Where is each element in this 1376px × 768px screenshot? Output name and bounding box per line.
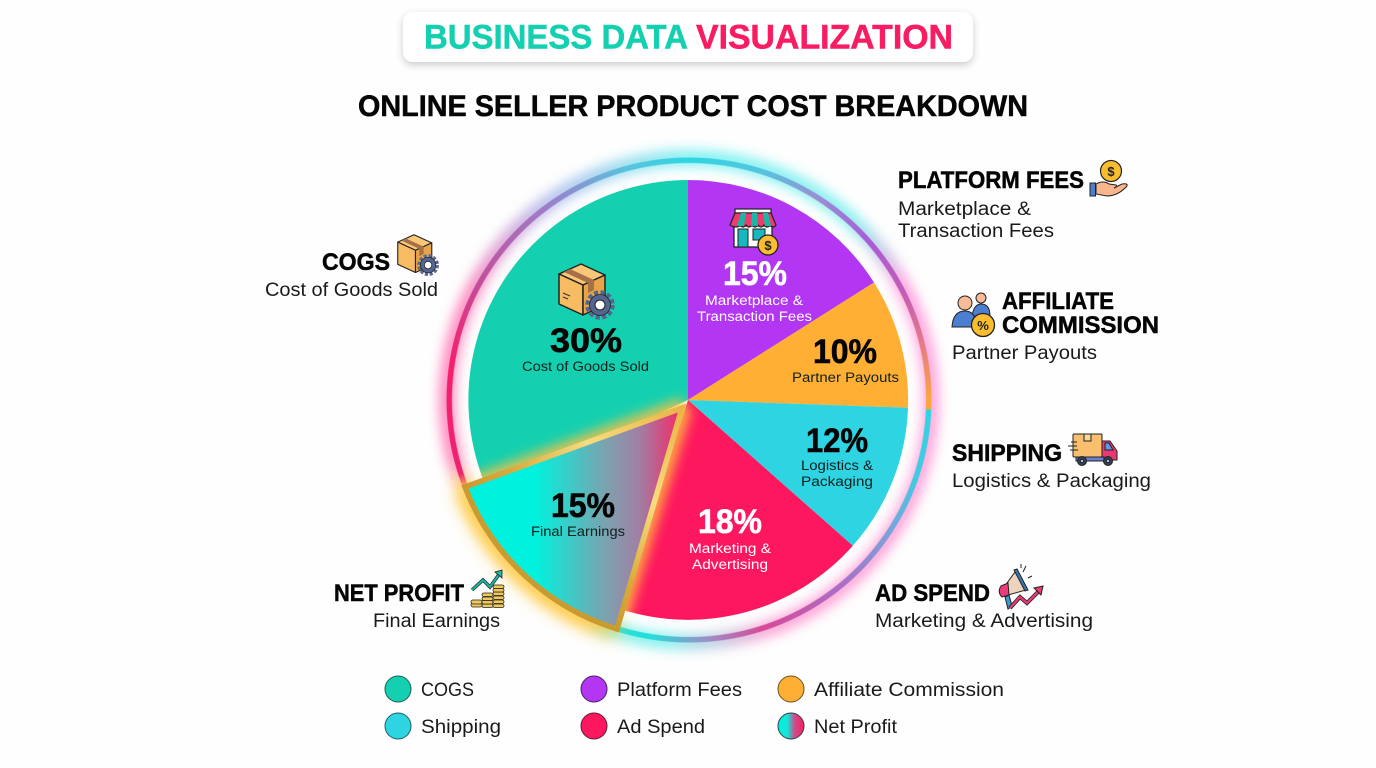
- title chip: [403, 12, 973, 62]
- icon: hand with coin: $: [1107, 164, 1115, 179]
- icon: hand with coin: [1090, 160, 1127, 196]
- callout: Affiliate Commission: COMMISSION: [1002, 312, 1159, 339]
- pie label: Net Profit: [531, 487, 625, 539]
- legend item: Affiliate Commission: Affiliate Commission: [814, 680, 1004, 701]
- callout: Ad Spend: [875, 580, 1093, 632]
- legend item: COGS: [385, 676, 474, 702]
- icon: storefront: $: [764, 238, 772, 253]
- callout: Affiliate Commission: AFFILIATE: [1002, 288, 1114, 315]
- callout: Net Profit: [334, 580, 500, 632]
- title chip: BUSINESS DATA: [424, 18, 688, 56]
- slice: COGS 30%: [468, 180, 688, 493]
- callout: Net Profit: NET PROFIT: [334, 580, 464, 607]
- callout: Platform Fees: PLATFORM FEES: [898, 167, 1084, 194]
- icon: megaphone with arrow: [999, 564, 1043, 609]
- icon: people with percent coin: %: [977, 318, 989, 333]
- title chip: VISUALIZATION: [696, 18, 953, 56]
- pie label: Ad Spend: 18%: [698, 503, 762, 541]
- callout: Shipping: [952, 440, 1151, 492]
- pie label: Ad Spend: Marketing &: [689, 541, 771, 556]
- callout: Affiliate Commission: Partner Payouts: [952, 343, 1097, 364]
- pie label: Ad Spend: Advertising: [692, 557, 768, 572]
- callout: Ad Spend: AD SPEND: [875, 580, 990, 607]
- pie label: Platform Fees: Transaction Fees: [697, 309, 812, 324]
- callout: COGS: Cost of Goods Sold: [265, 280, 438, 301]
- outer gradient ring: [446, 157, 932, 643]
- icon: people with percent coin: [952, 293, 994, 336]
- legend item: Shipping: Shipping: [421, 717, 501, 738]
- pie label: Shipping: Packaging: [801, 474, 873, 489]
- callout: Shipping: SHIPPING: [952, 440, 1062, 467]
- pie chart: [465, 180, 908, 629]
- legend item: Ad Spend: Ad Spend: [617, 717, 705, 738]
- infographic canvas: [266, 12, 1158, 740]
- legend item: Platform Fees: Platform Fees: [617, 680, 742, 701]
- callout: Platform Fees: [898, 167, 1084, 242]
- callout: Shipping: Logistics & Packaging: [952, 471, 1151, 492]
- callout: Ad Spend: Marketing & Advertising: [875, 611, 1093, 632]
- icon: coin stacks with growth arrow: [471, 570, 504, 608]
- pie label: Shipping: 12%: [806, 422, 868, 460]
- pie label: Net Profit: 15%: [551, 487, 615, 525]
- glow around pie ring: [430, 142, 947, 658]
- pie label: Ad Spend: [689, 503, 771, 572]
- slice: Affiliate Commission 10%: [688, 282, 908, 408]
- callout: COGS: [265, 249, 438, 301]
- pie label: Shipping: Logistics &: [801, 458, 873, 473]
- icon: storefront: [730, 209, 778, 255]
- slice: Net Profit 15%: [465, 408, 682, 629]
- pie label: Affiliate: [792, 333, 899, 385]
- slice: Shipping 12%: [688, 400, 908, 546]
- icon: box with gear in pie: [559, 264, 612, 317]
- net profit outer glow: [465, 487, 617, 629]
- pie label: COGS: Cost of Goods Sold: [522, 359, 649, 374]
- callout: Platform Fees: Marketplace &: [898, 199, 1031, 220]
- slice: Ad Spend 18%: [620, 400, 853, 620]
- callout: Net Profit: Final Earnings: [373, 611, 500, 632]
- pie label: Affiliate: 10%: [813, 333, 877, 371]
- pie label: Shipping: [801, 422, 873, 489]
- legend item: Platform Fees: [581, 676, 742, 702]
- pie label: COGS: 30%: [550, 322, 622, 360]
- legend item: Net Profit: [778, 713, 898, 739]
- legend item: Shipping: [385, 713, 501, 739]
- subtitle heading: ONLINE SELLER PRODUCT COST BREAKDOWN: [358, 90, 1028, 123]
- icon: delivery truck: [1068, 434, 1117, 466]
- legend item: COGS: COGS: [421, 680, 474, 701]
- callout: Affiliate Commission: [952, 288, 1159, 364]
- pie label: COGS: [522, 322, 649, 374]
- pie label: Affiliate: Partner Payouts: [792, 370, 899, 385]
- slice: Platform Fees 15%: [688, 180, 874, 400]
- icon: small box with gear: [398, 235, 437, 274]
- callout: COGS: COGS: [322, 249, 390, 276]
- wedge edge glow: [470, 406, 684, 626]
- pie label: Platform Fees: [697, 255, 812, 324]
- pie label: Platform Fees: 15%: [723, 255, 787, 293]
- pie label: Net Profit: Final Earnings: [531, 524, 625, 539]
- legend item: Net Profit: Net Profit: [814, 717, 898, 738]
- legend: [385, 676, 1004, 739]
- callout: Platform Fees: Transaction Fees: [898, 221, 1054, 242]
- legend item: Ad Spend: [581, 713, 705, 739]
- pie label: Platform Fees: Marketplace &: [705, 293, 803, 308]
- legend item: Affiliate Commission: [778, 676, 1004, 702]
